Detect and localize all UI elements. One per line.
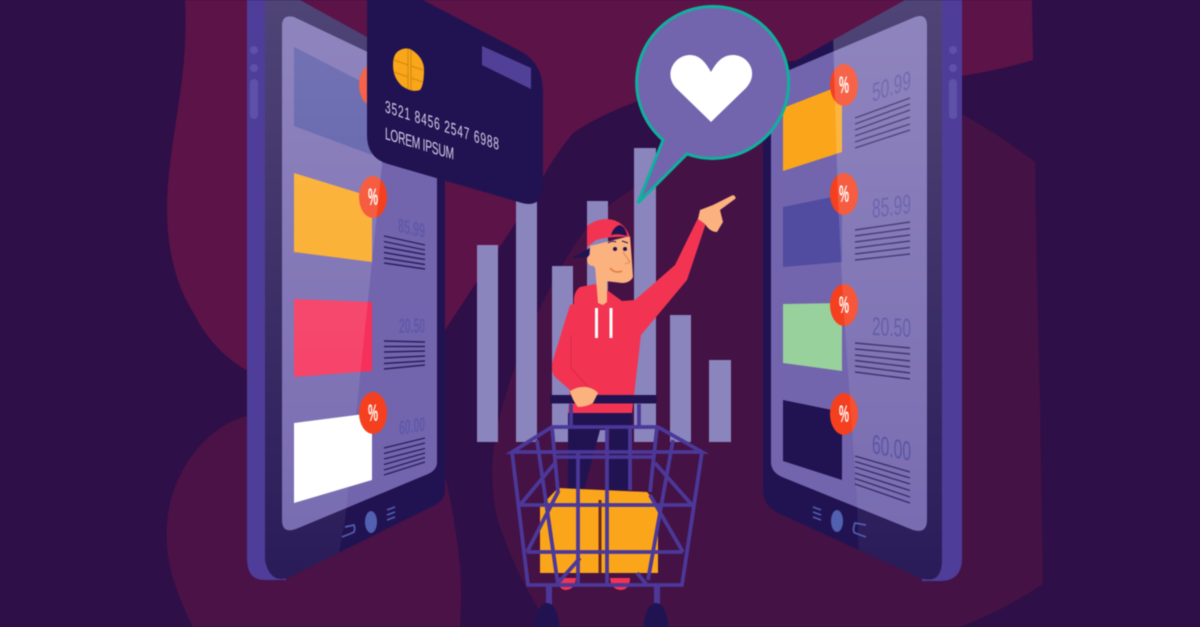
menu icon [813, 507, 821, 520]
badge 1 [359, 64, 387, 106]
background blob: centre right [492, 100, 1043, 627]
badge 2 [830, 173, 858, 215]
phone body [265, 0, 445, 579]
product 4 [783, 400, 842, 480]
hoodie strings [596, 308, 611, 338]
ear [587, 254, 599, 266]
phone screen [282, 16, 437, 530]
phone: left [247, 0, 445, 600]
home button [365, 511, 377, 533]
badge 4 [359, 392, 387, 434]
phone screen [771, 16, 927, 531]
credit card [367, 0, 543, 204]
hand on handle [570, 387, 598, 407]
description lines 3 [855, 343, 910, 379]
product 2 [783, 195, 842, 267]
phone: right [763, 0, 962, 600]
description lines 1 [855, 98, 910, 148]
product 3 [783, 303, 842, 371]
card strip [482, 46, 531, 89]
product 2 [294, 173, 372, 262]
icon: heart [670, 55, 752, 122]
background blob: upper maroon [167, 0, 1033, 372]
badge 3 [830, 284, 858, 326]
cart handle [550, 395, 657, 404]
pointing hand [698, 195, 736, 232]
description lines 3 [384, 438, 425, 475]
head [590, 236, 633, 283]
badge 3: % [839, 292, 849, 319]
cart wheels [535, 603, 668, 627]
neck [595, 266, 607, 305]
hoodie arm crease [571, 335, 589, 388]
cart legs [549, 585, 657, 607]
price 85.99: 85.99 [872, 188, 911, 224]
product 4 [294, 413, 372, 503]
hoodie [552, 218, 707, 413]
price 50.99: 50.99 [872, 65, 911, 108]
cap brim [572, 248, 590, 258]
screen glare [832, 0, 942, 578]
badge 4: % [368, 400, 378, 427]
cap hole [611, 225, 627, 236]
side buttons [949, 46, 957, 119]
badge 1 [830, 64, 858, 106]
shoes [558, 578, 630, 590]
description lines 4 [855, 456, 910, 503]
phone: left: 20.50 [399, 315, 425, 338]
menu icon [387, 507, 395, 520]
card chip [393, 48, 424, 91]
badge 2: % [368, 184, 378, 211]
cap [587, 219, 630, 247]
badge 4 [830, 393, 858, 435]
price 60.00: 60.00 [399, 414, 425, 440]
background blob: lower left [166, 416, 461, 627]
man with shopping cart [512, 195, 736, 627]
face [608, 241, 630, 272]
phone body [763, 0, 942, 580]
product 3 [294, 299, 372, 377]
price 85.99: 85.99 [398, 215, 425, 243]
back icon [854, 523, 866, 537]
trousers [568, 413, 632, 490]
home button [831, 510, 843, 532]
cart box [540, 488, 658, 573]
side buttons [250, 46, 258, 119]
description lines 2 [855, 222, 910, 260]
speech bubble [637, 6, 789, 203]
back icon [342, 525, 355, 537]
bar chart [477, 148, 731, 442]
phone side edge [247, 0, 286, 580]
description lines 2 [384, 341, 425, 369]
screen glare [265, 0, 385, 600]
card holder name: LOREM IPSUM [385, 125, 454, 164]
badge 2: % [839, 181, 849, 208]
description lines 1 [384, 236, 425, 269]
price 20.50: 20.50 [872, 311, 911, 343]
badge 2 [359, 176, 387, 218]
shopping cart frame [512, 404, 702, 585]
badge 1: % [839, 72, 849, 99]
card number: 3521 8456 2547 6988 [385, 98, 499, 155]
phone side edge [922, 0, 962, 581]
product 1 [783, 85, 842, 171]
price 60.00: 60.00 [872, 428, 911, 467]
badge 4: % [839, 401, 849, 428]
product 1 [294, 47, 372, 155]
